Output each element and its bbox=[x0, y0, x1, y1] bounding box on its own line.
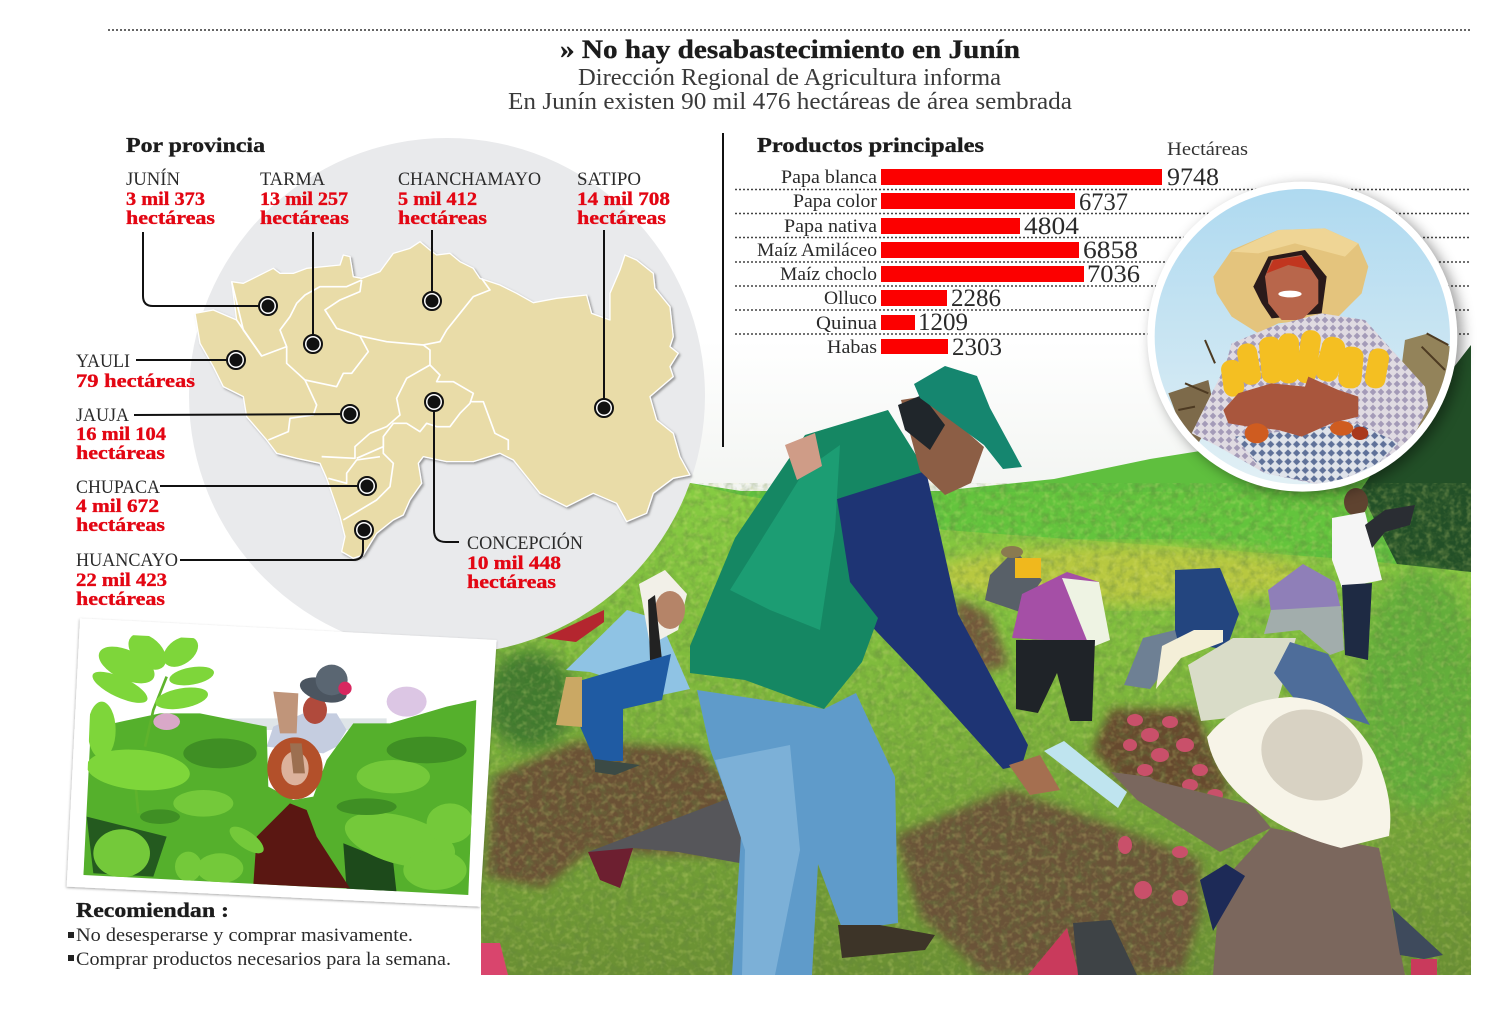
province leader lines and markers bbox=[134, 230, 613, 560]
label: Jauja: JAUJA bbox=[76, 405, 129, 426]
bar chart: main products: 4804 bbox=[1024, 213, 1080, 240]
bar chart: main products: 7036 bbox=[1087, 261, 1140, 288]
label: Satipo bbox=[577, 169, 670, 229]
label: Satipo: 14 mil 708 bbox=[577, 189, 670, 210]
label: Junín: 3 mil 373 bbox=[126, 189, 205, 210]
label: Chanchamayo bbox=[398, 169, 541, 229]
header dotted rule bbox=[108, 29, 1471, 31]
recommendations text block: No desesperarse y comprar masivamente. bbox=[76, 925, 413, 946]
label: Yauli bbox=[76, 351, 195, 392]
bar chart: main products: 6737 bbox=[1079, 189, 1128, 216]
recommendations text block: Comprar productos necesarios para la semana. bbox=[76, 949, 451, 970]
label: Yauli: YAULI bbox=[76, 351, 130, 372]
label: Tarma: TARMA bbox=[260, 169, 325, 190]
bar chart: main products: Papa nativa bbox=[784, 216, 878, 237]
hill and horizon bbox=[690, 451, 1470, 572]
bar chart: main products: Maíz Amiláceo bbox=[757, 240, 877, 261]
heading: productos principales: Productos principales bbox=[757, 133, 984, 157]
label: Chupaca: hectáreas bbox=[76, 515, 165, 536]
background workers bbox=[985, 546, 1370, 725]
label: Tarma: hectáreas bbox=[260, 208, 349, 229]
label: Chupaca bbox=[76, 477, 165, 536]
label: Tarma: 13 mil 257 bbox=[260, 189, 349, 210]
label: Concepción bbox=[467, 532, 583, 593]
trees bbox=[1360, 345, 1471, 572]
label: Chupaca: 4 mil 672 bbox=[76, 496, 159, 517]
bar chart: main products: Quinua bbox=[816, 313, 878, 334]
label: Chanchamayo: 5 mil 412 bbox=[398, 189, 477, 210]
man in green vest bbox=[690, 366, 1127, 975]
label: Junín: hectáreas bbox=[126, 208, 215, 229]
woman with straw hat bbox=[481, 693, 1443, 975]
label: Junín: JUNÍN bbox=[126, 168, 180, 190]
crouching woman bbox=[556, 570, 690, 775]
cameraman bbox=[1332, 488, 1415, 660]
label: Huancayo: 22 mil 423 bbox=[76, 570, 167, 591]
title block: En Junín existen 90 mil 476 hectáreas de área sembrada bbox=[508, 89, 1072, 115]
photo: farm workers in potato field bbox=[481, 340, 1480, 975]
label: Huancayo bbox=[76, 550, 178, 610]
label: Chanchamayo: CHANCHAMAYO bbox=[398, 169, 541, 190]
bar chart: main products: Olluco bbox=[824, 288, 877, 309]
label: Jauja bbox=[76, 405, 167, 464]
bar chart: main products: Papa color bbox=[793, 191, 878, 212]
photo: potato plants with farmer (tilted print) bbox=[67, 618, 497, 907]
bar chart: main products: 1209 bbox=[918, 309, 968, 336]
label: Junín bbox=[126, 168, 215, 229]
bar chart: main products: 2286 bbox=[951, 285, 1001, 312]
bar chart: main products: 9748 bbox=[1167, 164, 1219, 191]
label: Satipo: SATIPO bbox=[577, 169, 641, 190]
label: Concepción: hectáreas bbox=[467, 572, 556, 593]
title block: » No hay desabastecimiento en Junín bbox=[560, 35, 1021, 64]
heading: por provincia: Por provincia bbox=[126, 133, 266, 157]
label: Jauja: hectáreas bbox=[76, 443, 165, 464]
label: Satipo: hectáreas bbox=[577, 208, 666, 229]
label: Huancayo: hectáreas bbox=[76, 589, 165, 610]
bar chart: main products: Habas bbox=[827, 337, 877, 358]
recommendations text block: Recomiendan : bbox=[76, 898, 229, 922]
label: Huancayo: HUANCAYO bbox=[76, 550, 178, 571]
label: Concepción: 10 mil 448 bbox=[467, 553, 561, 574]
label: Yauli: 79 hectáreas bbox=[76, 371, 195, 392]
title block bbox=[508, 35, 1072, 115]
label: Concepción: CONCEPCIÓN bbox=[467, 532, 583, 554]
vertical divider bbox=[722, 133, 724, 447]
potatoes bbox=[1118, 714, 1223, 906]
bar chart: main products: Maíz choclo bbox=[780, 264, 877, 285]
photo: farmer with corn in circle bbox=[1147, 182, 1457, 492]
soil bbox=[486, 598, 1232, 975]
bar chart: main products: Papa blanca bbox=[781, 167, 878, 188]
bar chart: main products: 2303 bbox=[952, 334, 1002, 361]
bar chart: main products bbox=[735, 164, 1471, 361]
panel: grey circle behind map bbox=[189, 138, 705, 654]
recommendations text block bbox=[68, 898, 451, 970]
bar chart: main products: 6858 bbox=[1083, 237, 1138, 264]
map: Junín provinces bbox=[195, 242, 690, 558]
label: Tarma bbox=[260, 169, 349, 229]
axis label: hectáreas: Hectáreas bbox=[1167, 139, 1248, 160]
field bbox=[481, 483, 1471, 975]
label: Jauja: 16 mil 104 bbox=[76, 424, 167, 445]
label: Chupaca: CHUPACA bbox=[76, 477, 160, 498]
title block: Dirección Regional de Agricultura informa bbox=[578, 65, 1001, 91]
label: Chanchamayo: hectáreas bbox=[398, 208, 487, 229]
tarp on ground bbox=[588, 796, 745, 888]
